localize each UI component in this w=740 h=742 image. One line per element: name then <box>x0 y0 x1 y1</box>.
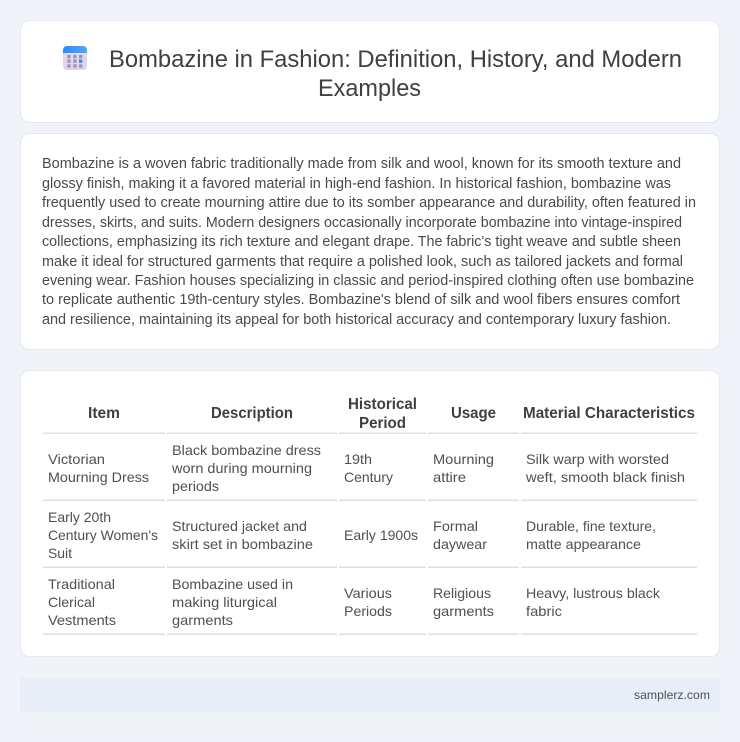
table row: Early 20th Century Women's Suit: Durable, fine texture, <box>526 518 656 534</box>
icon: calendar <box>63 46 87 70</box>
table row: Traditional Clerical Vestments: Bombazine used in <box>172 576 293 592</box>
text block: bombazine description: glossy finish, making it a favored material in high-end fashion. In historical fashion, bombazine was <box>42 176 671 192</box>
text block: bombazine description: frequently used to create mourning attire due to its somber appearance and durability, often featured in <box>42 195 696 211</box>
text block: bombazine description: Bombazine is a woven fabric traditionally made from silk and wool, known for its smooth texture and <box>42 156 681 172</box>
text block: bombazine description: to replicate authentic 19th-century styles. Bombazine's blend of silk and wool fibers ensures comfort <box>42 292 680 308</box>
table row: Early 20th Century Women's Suit: Structured jacket and <box>172 518 307 534</box>
table row: Traditional Clerical Vestments: fabric <box>526 603 562 619</box>
table row: Victorian Mourning Dress: worn during mourning <box>171 460 312 476</box>
text block: bombazine description: collections, emphasizing its rich texture and elegant drape. The fabric's tight weave and subtle sheen <box>42 234 681 250</box>
table row: Early 20th Century Women's Suit: matte appearance <box>526 536 641 552</box>
table header row: Description <box>211 405 293 422</box>
table header row: Historical <box>348 396 417 413</box>
table header row: Item <box>88 405 120 422</box>
text block: bombazine description: and resilience, maintaining its appeal for both historical accuracy and contemporary luxury fashion. <box>42 312 671 328</box>
panel: table card <box>20 370 720 656</box>
table row: Victorian Mourning Dress: 19th <box>344 451 372 467</box>
title <box>109 46 682 102</box>
table row: Early 20th Century Women's Suit: Formal <box>433 518 478 534</box>
text block: bombazine description: dresses, skirts, and suits. Modern designers occasionally incorporate bombazine into vintage-inspired <box>42 215 682 231</box>
text block: bombazine description <box>42 156 696 328</box>
table row: Traditional Clerical Vestments: garments <box>172 612 233 628</box>
table row: Victorian Mourning Dress <box>48 442 685 494</box>
table row: Early 20th Century Women's Suit: Century Women's <box>48 527 158 543</box>
table header row: Period <box>359 415 406 432</box>
table row: Victorian Mourning Dress: attire <box>433 469 466 485</box>
title: Bombazine in Fashion: Definition, History, and Modern <box>109 46 682 73</box>
table row: Early 20th Century Women's Suit: Early 20th <box>48 509 111 525</box>
table row: Victorian Mourning Dress: Mourning <box>433 451 494 467</box>
table row: Traditional Clerical Vestments: Religious <box>433 585 491 601</box>
footer text: samplerz.com <box>634 688 710 702</box>
text block: bombazine description: make it ideal for structured garments that require a polished look, such as tailored jackets and formal <box>42 254 683 270</box>
panel: title card <box>20 20 720 122</box>
table row: Victorian Mourning Dress: Victorian <box>48 451 105 467</box>
table header row: Material Characteristics <box>523 405 695 422</box>
table row: Early 20th Century Women's Suit: Early 1900s <box>344 527 418 543</box>
table row: Victorian Mourning Dress: weft, smooth black finish <box>525 469 685 485</box>
table row: Victorian Mourning Dress: Silk warp with worsted <box>526 451 669 467</box>
text block: bombazine description: evening wear. Fashion houses specializing in classic and period-inspired clothing often use bombazine <box>42 273 694 289</box>
table row: Traditional Clerical Vestments: making liturgical <box>172 594 277 610</box>
table row: Traditional Clerical Vestments: Vestments <box>48 612 116 628</box>
table row: Victorian Mourning Dress: Black bombazine dress <box>172 442 321 458</box>
table header row <box>88 396 695 432</box>
table row: Early 20th Century Women's Suit: daywear <box>433 536 487 552</box>
table row: Traditional Clerical Vestments: Clerical <box>48 594 95 610</box>
table row: Traditional Clerical Vestments: Heavy, lustrous black <box>526 585 661 601</box>
table row: Traditional Clerical Vestments <box>48 576 661 628</box>
table row: Traditional Clerical Vestments: Various <box>344 585 392 601</box>
title: Examples <box>318 75 421 102</box>
table row: Victorian Mourning Dress: Mourning Dress <box>48 469 149 485</box>
table header row: Usage <box>451 405 496 422</box>
footer bar <box>20 678 720 712</box>
table row: Traditional Clerical Vestments: Traditional <box>48 576 115 592</box>
panel: introduction <box>20 134 720 350</box>
table row: Victorian Mourning Dress: periods <box>172 478 219 494</box>
table row: Traditional Clerical Vestments: Periods <box>344 603 392 619</box>
table row: Traditional Clerical Vestments: garments <box>433 603 494 619</box>
table row: Early 20th Century Women's Suit: Suit <box>48 545 72 561</box>
table row: Early 20th Century Women's Suit: skirt set in bombazine <box>172 536 313 552</box>
table row: Early 20th Century Women's Suit <box>48 509 656 561</box>
table row: Victorian Mourning Dress: Century <box>344 469 393 485</box>
